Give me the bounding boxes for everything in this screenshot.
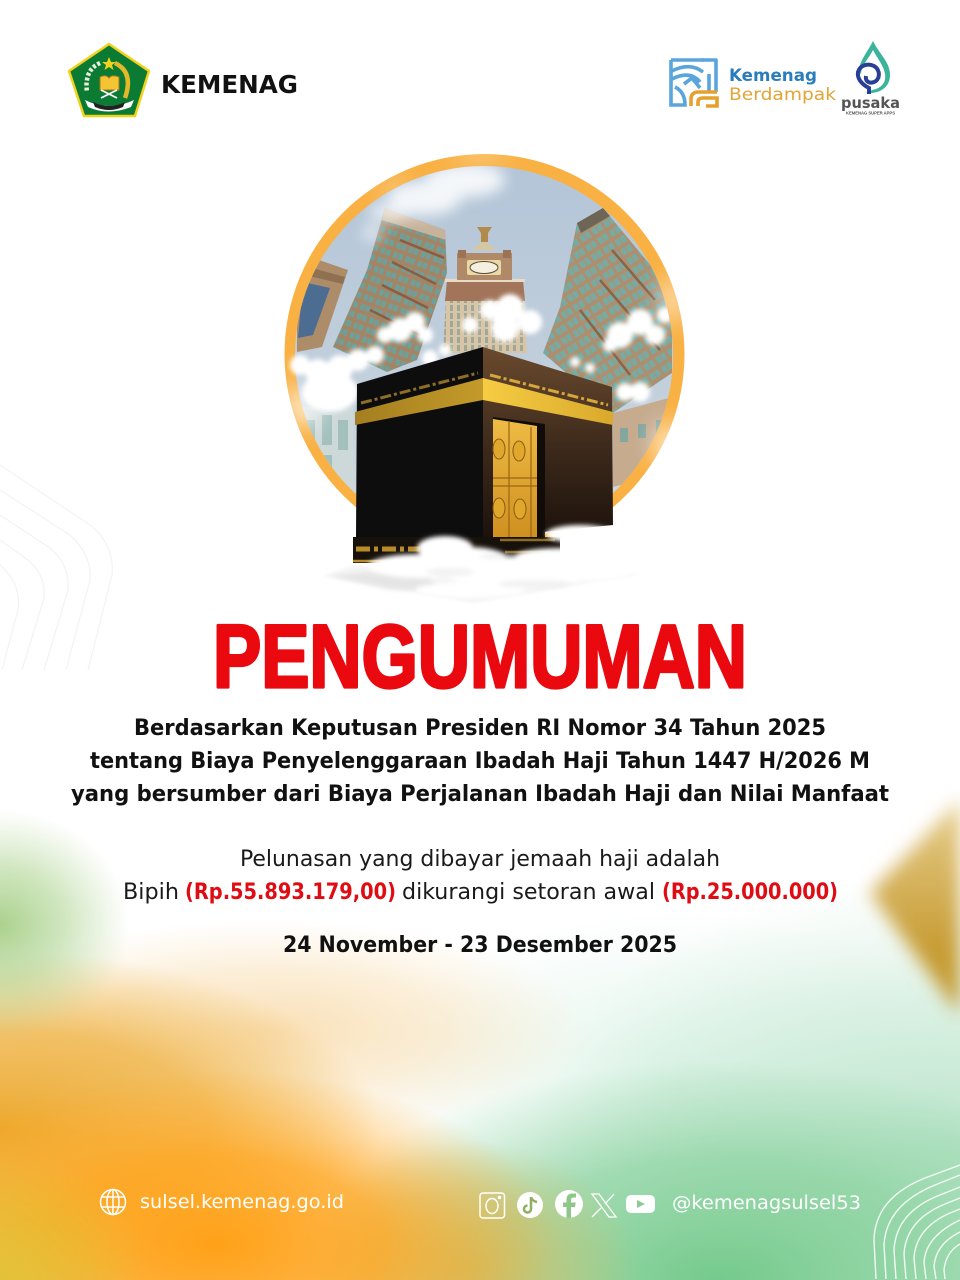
gold band left xyxy=(355,378,483,425)
curved lines bottom right xyxy=(874,1165,960,1279)
body text: payment: (Rp.55.893.179,00) xyxy=(185,880,396,905)
body text: payment: dikurangi setoran awal xyxy=(402,880,655,905)
footer: social media xyxy=(480,1190,861,1218)
icon: instagram xyxy=(480,1193,504,1218)
brand text: Kemenag: Kemenag xyxy=(729,66,817,86)
icon: pusaka drop xyxy=(858,41,890,94)
sky and towers circle xyxy=(290,163,680,544)
brand text: Berdampak: Berdampak xyxy=(729,85,836,105)
orange ring xyxy=(284,154,684,554)
sky clouds xyxy=(377,294,673,402)
left building xyxy=(297,258,348,352)
ring clouds xyxy=(285,151,682,467)
body text: payment: (Rp.25.000.000) xyxy=(662,880,838,905)
body text: decree: tentang Biaya Penyelenggaraan Ibadah Haji Tahun 1447 H/2026 M xyxy=(90,749,870,774)
right face xyxy=(483,347,613,538)
left tower xyxy=(333,208,447,372)
logo: Kemenag Berdampak xyxy=(671,59,836,106)
handle text: @kemenagsulsel53 xyxy=(672,1193,861,1214)
illustration: Kaaba with clock tower xyxy=(284,151,684,603)
icon: facebook xyxy=(555,1190,583,1218)
icon: X xyxy=(592,1194,616,1217)
date text: 24 November - 23 Desember 2025 xyxy=(283,933,677,958)
body text: decree xyxy=(71,716,890,807)
brand text: pusaka: pusaka xyxy=(841,94,900,112)
door frame xyxy=(493,417,545,537)
ornament right xyxy=(490,375,608,405)
website text: sulsel.kemenag.go.id xyxy=(140,1191,344,1213)
logo text: KEMENAG: KEMENAG xyxy=(161,70,298,99)
body text: decree: Berdasarkan Keputusan Presiden RI Nomor 34 Tahun 2025 xyxy=(134,716,826,741)
icon: tiktok xyxy=(517,1192,543,1218)
left face xyxy=(356,347,483,538)
body text: decree: yang bersumber dari Biaya Perjalanan Ibadah Haji dan Nilai Manfaat xyxy=(71,782,890,807)
footer: website xyxy=(100,1190,344,1214)
body text: payment: Bipih xyxy=(123,880,179,905)
icon: globe xyxy=(100,1190,126,1214)
curved lines left xyxy=(0,465,112,670)
clouds at base xyxy=(323,525,640,603)
door xyxy=(493,419,537,537)
body text: payment: Pelunasan yang dibayar jemaah haji adalah xyxy=(240,847,720,872)
lower left building xyxy=(302,407,353,491)
brand text: Kemenag Super Apps: KEMENAG SUPER APPS xyxy=(846,110,895,116)
right lower building xyxy=(613,398,668,487)
icon: youtube xyxy=(626,1195,655,1213)
logo: Kemenag emblem xyxy=(69,44,149,116)
ornament left xyxy=(361,373,478,403)
Kaaba xyxy=(353,347,613,563)
body text: payment xyxy=(123,847,838,905)
title: PENGUMUMAN xyxy=(213,606,747,706)
right tower xyxy=(543,208,672,413)
logo: Pusaka xyxy=(841,41,900,116)
decorative gold blur right xyxy=(870,800,960,1015)
top cloud xyxy=(362,163,505,241)
gold band right xyxy=(483,378,613,425)
clock tower xyxy=(443,227,527,353)
base xyxy=(353,537,560,563)
icon: Berdampak mark xyxy=(671,59,717,106)
